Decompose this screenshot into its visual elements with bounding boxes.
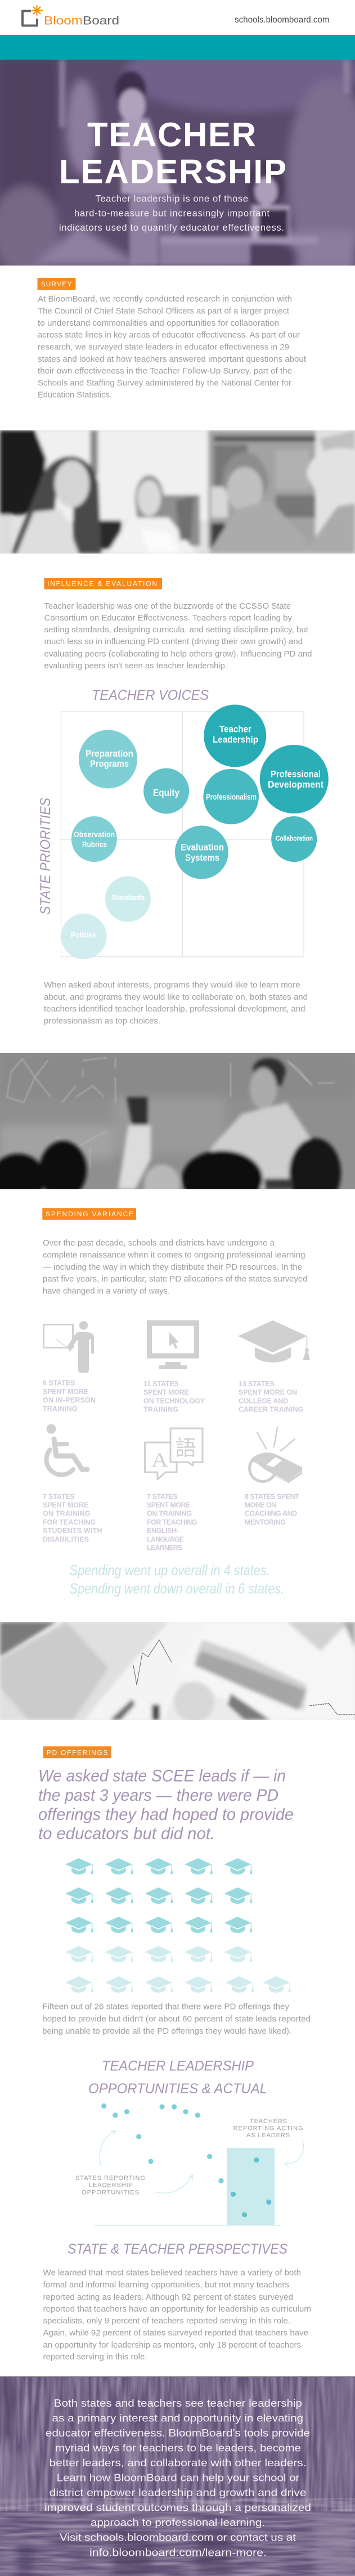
heading: state and teacher perspectives: STATE & TEACHER PERSPECTIVES xyxy=(68,2241,287,2257)
label: technology xyxy=(143,1380,205,1413)
heading: teacher leadership opportunities and actual: OPPORTUNITIES & ACTUAL xyxy=(88,2081,267,2097)
text block: spending: — including the way in which they distribute their PD resources. In the xyxy=(43,1263,302,1272)
bubble: preparation programs: Programs xyxy=(90,758,129,769)
label: english learners xyxy=(147,1493,197,1552)
text block: survey: to understand commonalities and opportunities for collaboration xyxy=(38,319,279,328)
bar: teachers acting as leaders xyxy=(227,2148,275,2225)
section tag: spending variance xyxy=(42,1208,136,1220)
heading: pd offerings question: We asked state SCEE leads if — in xyxy=(38,1767,286,1786)
text block: influence: much less so in influencing PD content (driving their own growth) and xyxy=(44,637,303,646)
text block: interests: When asked about interests, programs they would like to learn more xyxy=(44,981,300,990)
label: teachers reporting acting as leaders: AS LEADERS xyxy=(246,2132,290,2139)
label: technology: SPENT MORE xyxy=(143,1388,189,1396)
icon: whistle xyxy=(248,1427,302,1483)
label: english learners: LANGUAGE xyxy=(147,1536,184,1544)
title: TEACHER xyxy=(87,116,256,154)
text block: fifteen of 26 states: Fifteen out of 26 states reported that there were PD offerings they xyxy=(42,2003,290,2012)
text block: interests: about, and programs they would like to collaborate on, both states and xyxy=(44,993,308,1002)
label: states reporting leadership opportunities: STATES REPORTING xyxy=(75,2175,145,2182)
label: coaching: COACHING AND xyxy=(245,1510,297,1518)
bubble: professionalism: Professionalism xyxy=(206,793,257,802)
label: states reporting leadership opportunities: LEADERSHIP xyxy=(89,2182,133,2188)
closing message: Learn how BloomBoard can help your school or xyxy=(57,2472,299,2484)
closing message: as a primary interest and opportunity in elevating xyxy=(52,2412,303,2424)
bubble: teacher leadership: Leadership xyxy=(213,734,258,745)
text block: survey: across state lines in key areas of educator effectiveness. As part of our xyxy=(38,331,300,340)
hero subtitle xyxy=(59,194,284,233)
label: teachers reporting acting as leaders: REPORTING ACTING xyxy=(233,2125,303,2132)
bubble: policies xyxy=(61,914,107,959)
label: college and career: 13 STATES xyxy=(239,1380,275,1388)
label: disabilities: 7 STATES xyxy=(43,1493,75,1501)
label: teachers reporting acting as leaders xyxy=(233,2118,303,2139)
icon: translation speech bubbles: A xyxy=(151,1449,168,1471)
label: in-person: SPENT MORE xyxy=(43,1388,88,1396)
bubble: preparation programs xyxy=(79,730,137,789)
text block: spending: have changed in a variety of ways. xyxy=(43,1287,170,1296)
photo: laptop and financial charts xyxy=(0,1622,355,1722)
text block: fifteen of 26 states: being unable to provide all the PD offerings they would have liked). xyxy=(42,2027,291,2036)
section tag: pd offerings xyxy=(43,1746,111,1758)
bubble: teacher leadership: Teacher xyxy=(219,724,251,735)
closing message: Visit schools.bloomboard.com or contact us at xyxy=(60,2532,296,2543)
label: college and career: SPENT MORE ON xyxy=(239,1388,297,1396)
text block: perspectives: reported serving in this role. xyxy=(43,2353,147,2362)
text block: fifteen of 26 states xyxy=(42,2003,311,2036)
label: english learners: ON TRAINING xyxy=(147,1510,192,1518)
label: coaching: MORE ON xyxy=(245,1501,276,1509)
logo wordmark: Bloom Board xyxy=(44,15,119,27)
text block: perspectives: reported that teachers have an opportunity for leadership as curriculum xyxy=(43,2305,311,2314)
dots: states reporting leadership opportunities xyxy=(101,2103,271,2217)
hero subtitle: hard-to-measure but increasingly important xyxy=(74,208,269,218)
bubble: standards xyxy=(105,876,151,921)
teal band xyxy=(0,35,355,60)
chart: leadership opportunities versus actual xyxy=(75,2103,303,2226)
bubble: observation rubrics xyxy=(71,816,117,862)
bubble: policies: Policies xyxy=(71,930,96,939)
closing message: educator effectiveness. BloomBoard's tools provide xyxy=(46,2427,310,2439)
section tag: influence and evaluation xyxy=(44,578,162,590)
label: in-person: 6 STATES xyxy=(43,1379,75,1387)
text block: survey: Education Statistics. xyxy=(38,390,112,399)
text block: spending: complete renaissance when it comes to ongoing professional learning xyxy=(43,1251,305,1260)
bubble chart: teacher voices vs state priorities xyxy=(38,687,329,959)
label: english learners: FOR TEACHING xyxy=(147,1518,197,1526)
label: states reporting leadership opportunities xyxy=(75,2175,145,2196)
section tag: spending variance: SPENDING VARIANCE xyxy=(46,1210,133,1218)
stat: technology training xyxy=(143,1320,205,1413)
heading: teacher leadership opportunities and actual xyxy=(88,2058,267,2097)
spending summary callout: Spending went up overall in 4 states. xyxy=(70,1562,270,1579)
icon: translation speech bubbles: 語 xyxy=(175,1437,196,1460)
hero subtitle: Teacher leadership is one of those xyxy=(96,194,248,204)
text block: influence: evaluating peers (collaborating to help others grow). Influencing PD and xyxy=(44,650,312,659)
label: college and career: COLLEGE AND xyxy=(239,1397,288,1405)
icon: BloomBoard logo mark xyxy=(23,6,42,26)
hero panel: teacher photo with title xyxy=(0,60,355,266)
text block: interests: teachers identified teacher leadership, professional development, and xyxy=(44,1005,305,1014)
text block: interests xyxy=(44,981,308,1026)
text block: survey: research, we surveyed state leaders in educator effectiveness in 29 xyxy=(38,343,289,352)
heading: pd offerings question: offerings they had hoped to provide xyxy=(38,1805,294,1824)
text block: influence: Teacher leadership was one of the buzzwords of the CCSSO State xyxy=(44,602,291,611)
bubble: equity: Equity xyxy=(153,787,179,798)
label: coaching: 8 STATES SPENT xyxy=(245,1493,299,1501)
spending summary callout: Spending went down overall in 6 states. xyxy=(70,1580,284,1597)
stat: english-language learners xyxy=(145,1428,203,1552)
text block: perspectives: an opportunity for leadership as mentors, only 18 percent of teachers xyxy=(43,2341,301,2350)
label: english learners: LEARNERS xyxy=(147,1544,182,1552)
bubble: preparation programs: Preparation xyxy=(86,748,133,759)
bubble: professional development: Professional xyxy=(271,769,321,780)
hero subtitle: indicators used to quantify educator effectiveness. xyxy=(59,223,284,233)
label: college and career xyxy=(239,1380,303,1413)
icon: teacher at board xyxy=(44,1321,94,1373)
title: LEADERSHIP xyxy=(59,153,286,190)
icon: wheelchair xyxy=(46,1424,87,1474)
header xyxy=(23,6,330,27)
darker caps: states with unmet offerings xyxy=(65,1858,252,1933)
stat: college and career training xyxy=(238,1320,310,1413)
arrow: to bar xyxy=(285,2140,303,2166)
footer panel: call to action xyxy=(0,2376,355,2576)
heading: pd offerings question xyxy=(38,1767,294,1843)
label: in-person: ON IN-PERSON xyxy=(43,1396,96,1404)
website address: schools.bloomboard.com xyxy=(235,15,330,25)
closing message: myriad ways for teachers to be leaders, become xyxy=(55,2442,301,2454)
bubble: professional development xyxy=(260,745,329,813)
label: teachers reporting acting as leaders: TEACHERS xyxy=(250,2118,287,2125)
section tag: pd offerings: PD OFFERINGS xyxy=(47,1748,108,1756)
lighter caps: remaining states xyxy=(65,1946,291,1993)
label: states reporting leadership opportunities: OPPORTUNITIES xyxy=(82,2190,139,2196)
section tag: influence and evaluation: INFLUENCE & EVALUATION xyxy=(47,579,157,587)
spending summary callout xyxy=(70,1562,284,1597)
bubble: professional development: Development xyxy=(268,779,323,790)
label: disabilities: SPENT MORE xyxy=(43,1501,88,1509)
label: technology: 11 STATES xyxy=(143,1380,179,1388)
label: disabilities: DISABILITIES xyxy=(43,1536,89,1544)
pictogram: graduation caps, 15 of 26 states highlighted xyxy=(65,1858,291,1993)
bubble: observation rubrics: Rubrics xyxy=(82,840,107,849)
title xyxy=(59,116,286,190)
icon: computer monitor xyxy=(147,1320,199,1369)
bubble: evaluation systems: Evaluation xyxy=(181,842,224,853)
text block: influence xyxy=(44,602,312,671)
stat: in-person training xyxy=(43,1321,96,1413)
text block: perspectives: specialists, only 9 percent of teachers reported serving in this role. xyxy=(43,2317,290,2326)
label: disabilities: STUDENTS WITH xyxy=(43,1527,102,1535)
text block: fifteen of 26 states: hoped to provide but didn't (or about 60 percent of state leads reported xyxy=(42,2015,311,2024)
text block: influence: setting standards, designing curricula, and setting discipline policy, but xyxy=(44,626,308,635)
icon: translation speech bubbles xyxy=(145,1428,203,1480)
text block: survey: their own effectiveness in the Teacher Follow-Up Survey, part of the xyxy=(38,367,292,376)
hero photo (purple duotone classroom) xyxy=(0,60,355,266)
icon: graduation cap xyxy=(238,1320,310,1363)
quadrant grid xyxy=(60,712,304,957)
label: technology: TRAINING xyxy=(143,1405,178,1413)
text block: spending xyxy=(43,1239,307,1296)
chart baseline xyxy=(94,2225,280,2226)
closing message: district empower leadership and growth and drive xyxy=(50,2487,306,2498)
arrow: to dots lower xyxy=(155,2175,192,2193)
label: in-person xyxy=(43,1379,96,1413)
label: in-person: TRAINING xyxy=(43,1405,78,1413)
label: english learners: 7 STATES xyxy=(147,1493,178,1501)
section tag: survey xyxy=(37,278,75,290)
bubble: evaluation systems xyxy=(175,826,228,879)
text block: influence: Consortium on Educator Effectiveness. Teachers report leading by xyxy=(44,614,293,623)
bubble: standards: Standards xyxy=(111,893,145,902)
closing message xyxy=(44,2397,311,2559)
text block: spending: past five years, in particular, state PD allocations of the states surveyed xyxy=(43,1275,307,1284)
text block: survey: states and looked at how teachers answered important questions about xyxy=(38,355,306,364)
bubble: observation rubrics: Observation xyxy=(74,830,115,839)
bubble: equity xyxy=(143,768,189,813)
photo: teachers collaborating in library xyxy=(0,430,355,554)
text block: perspectives: reported acting as leaders. Although 92 percent of states surveyed xyxy=(43,2293,293,2302)
text block: influence: evaluating peers isn't seen as teacher leadership. xyxy=(44,662,227,671)
footer photo (purple duotone bookshelves) xyxy=(0,2376,355,2576)
bubble: teacher leadership xyxy=(204,704,266,767)
heading: teacher leadership opportunities and actual: TEACHER LEADERSHIP xyxy=(102,2058,254,2074)
stat: students with disabilities xyxy=(43,1424,102,1544)
text block: survey xyxy=(38,295,306,399)
text block: perspectives: Again, while 92 percent of states surveyed reported that teachers have xyxy=(43,2329,308,2338)
text block: survey: At BloomBoard, we recently conducted research in conjunction with xyxy=(38,295,292,304)
heading: pd offerings question: to educators but did not. xyxy=(38,1824,215,1843)
bubble: evaluation systems: Systems xyxy=(185,852,219,863)
label: disabilities: ON TRAINING xyxy=(43,1510,90,1518)
closing message: info.bloomboard.com/learn-more. xyxy=(89,2546,267,2559)
section tag: survey: SURVEY xyxy=(41,280,72,288)
closing message: improved student outcomes through a personalized xyxy=(44,2502,311,2514)
text block: spending: Over the past decade, schools and districts have undergone a xyxy=(43,1239,275,1248)
text block: perspectives: We learned that most states believed teachers have a variety of both xyxy=(43,2269,301,2278)
arrow: to dots upper left xyxy=(100,2131,116,2166)
label: english learners: SPENT MORE xyxy=(147,1501,190,1509)
text block: perspectives xyxy=(43,2269,311,2362)
bubble: professionalism xyxy=(203,769,259,824)
closing message: better leaders, and collaborate with other leaders. xyxy=(50,2457,306,2469)
label: technology: ON TECHNOLOGY xyxy=(143,1397,205,1405)
closing message: approach to professional learning. xyxy=(91,2516,265,2528)
bubble: collaboration xyxy=(271,816,317,862)
text block: perspectives: formal and informal learning opportunities, but not many teachers xyxy=(43,2281,289,2290)
axis label: state priorities: STATE PRIORITIES xyxy=(38,798,53,915)
heading: pd offerings question: the past 3 years — there were PD xyxy=(38,1786,278,1805)
closing message: Both states and teachers see teacher leadership xyxy=(54,2397,302,2409)
label: coaching: MENTORING xyxy=(245,1518,286,1526)
chart heading: teacher voices: TEACHER VOICES xyxy=(92,687,209,703)
label: college and career: CAREER TRAINING xyxy=(239,1405,303,1413)
label: english learners: ENGLISH- xyxy=(147,1527,179,1535)
text block: survey: The Council of Chief State School Officers as part of a larger project xyxy=(38,307,289,316)
label: coaching xyxy=(245,1493,299,1526)
text block: survey: Schools and Staffing Survey administered by the National Center for xyxy=(38,379,291,388)
bubble: collaboration: Collaboration xyxy=(276,835,313,843)
text block: interests: professionalism as top choices. xyxy=(44,1017,160,1026)
label: disabilities xyxy=(43,1493,102,1544)
label: disabilities: FOR TEACHING xyxy=(43,1518,96,1526)
stat: coaching and mentoring xyxy=(245,1427,302,1526)
photo: teacher at chalkboard xyxy=(0,1053,355,1189)
